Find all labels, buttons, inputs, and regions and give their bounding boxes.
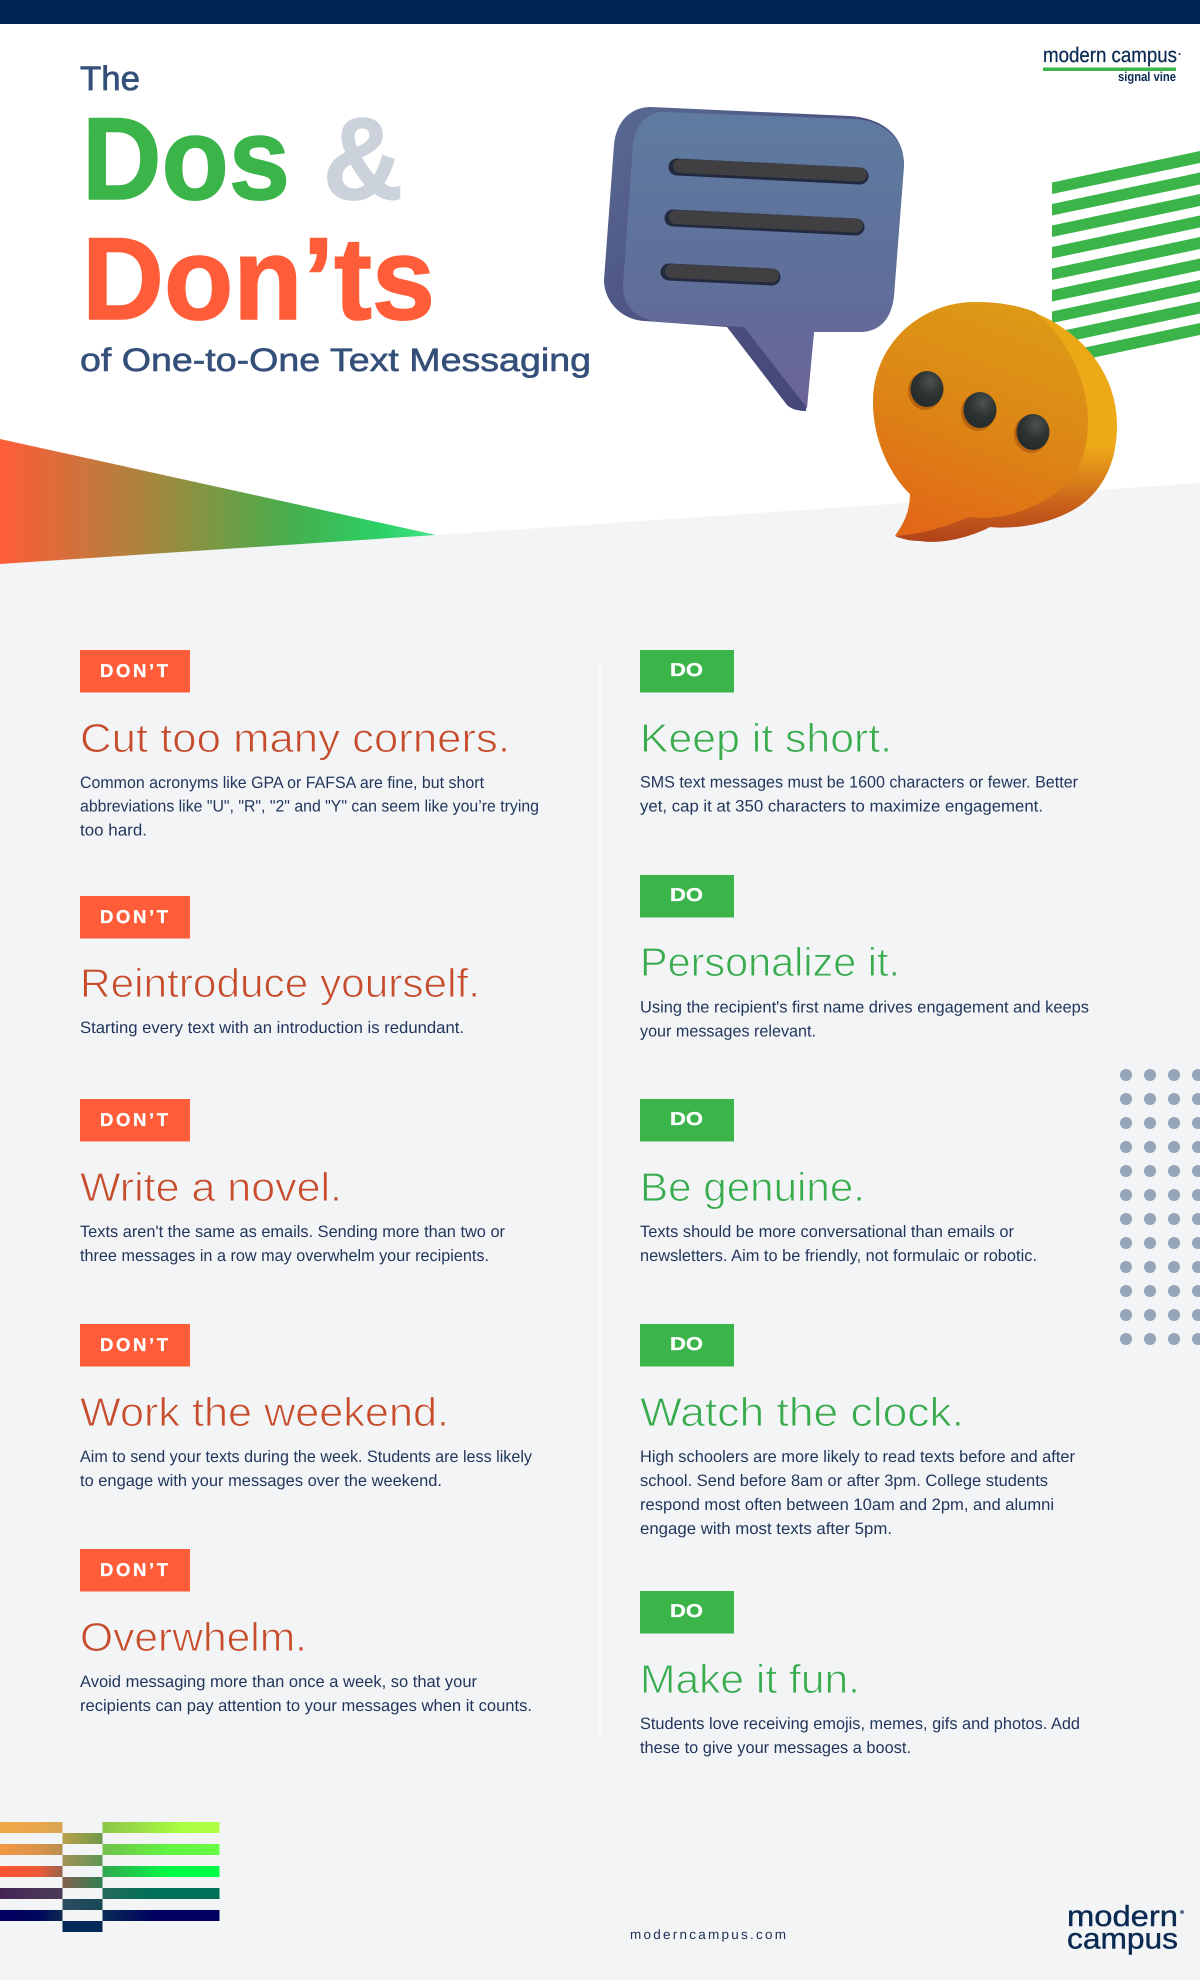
subtitle: of One-to-One Text Messaging [80,342,591,378]
body text: yet, cap it at 350 characters to maximize engagement. [640,798,1043,816]
do badge [640,650,734,692]
body text: Students love receiving emojis, memes, gifs and photos. Add [640,1715,1080,1733]
heading: Personalize it. [640,939,900,985]
heading: Work the weekend. [80,1389,449,1435]
body text: to engage with your messages over the weekend. [80,1472,442,1490]
don't badge: DON’T [100,1334,169,1355]
body text: these to give your messages a boost. [640,1739,911,1757]
title word: Don'ts: Don’ts [82,213,435,344]
heading: Keep it short. [640,715,892,761]
dot grid decoration [1120,1069,1200,1345]
panel: do personalize it [640,875,1089,1040]
body text: newsletters. Aim to be friendly, not formulaic or robotic. [640,1247,1037,1265]
do badge [640,1099,734,1142]
body text [640,1223,1037,1265]
body text: Texts should be more conversational than emails or [640,1223,1014,1241]
heading: Write a novel. [80,1164,342,1210]
footer logo: modern campus [1067,1901,1184,1956]
don't badge [80,1099,190,1142]
do badge: DO [670,659,703,680]
panel: do keep it short [640,650,1078,816]
title [80,60,591,378]
grey lower background panel [0,483,1200,1980]
footer url: moderncampus.com [630,1927,786,1942]
panel: don't work the weekend [80,1324,533,1490]
do badge [640,875,734,918]
body text: respond most often between 10am and 2pm, and alumni [640,1496,1054,1514]
heading: Watch the clock. [640,1389,964,1435]
do badge [640,1591,734,1634]
body text: engage with most texts after 5pm. [640,1520,892,1538]
don't badge [80,1549,190,1592]
title word: Dos: Dos [82,93,290,224]
body text [640,998,1089,1040]
body text: High schoolers are more likely to read texts before and after [640,1448,1076,1466]
don't badge: DON’T [100,1109,169,1130]
heading: Overwhelm. [80,1614,307,1660]
heading: Make it fun. [640,1656,860,1702]
do badge: DO [670,1108,703,1129]
do badge: DO [670,1600,703,1621]
body text: three messages in a row may overwhelm your recipients. [80,1247,489,1265]
heading: Reintroduce yourself. [80,960,480,1006]
body text [640,1715,1080,1757]
body text: SMS text messages must be 1600 characters or fewer. Better [640,774,1078,792]
green diagonal stripes [1052,151,1200,366]
body text [640,774,1078,816]
panel: don't overwhelm [80,1549,532,1715]
logo: modern campus signal vine: signal vine [1118,69,1176,84]
heading: Be genuine. [640,1164,865,1210]
body text [640,1448,1076,1538]
body text: Texts aren't the same as emails. Sending more than two or [80,1223,505,1241]
body text: Starting every text with an introduction is redundant. [80,1019,464,1037]
logo: modern campus signal vine [1043,44,1180,84]
title ampersand: & [323,93,403,224]
icon: blue speech bubble [604,107,904,411]
column divider [599,660,601,1738]
don't badge: DON’T [100,906,169,927]
do badge: DO [670,1333,703,1354]
body text: Avoid messaging more than once a week, so that your [80,1673,477,1691]
panel: do be genuine [640,1099,1037,1265]
body text [80,1448,533,1490]
body text: recipients can pay attention to your messages when it counts. [80,1697,532,1715]
top navy bar [0,0,1200,24]
body text: abbreviations like "U", "R", "2" and "Y" can seem like you’re trying [80,798,539,816]
body text [80,1673,532,1715]
gradient wedge [0,439,436,564]
panel: do watch the clock [640,1324,1076,1538]
footer logo: modern campus: campus [1067,1924,1178,1956]
panel: do make it fun [640,1591,1080,1757]
body text: Using the recipient's first name drives engagement and keeps [640,998,1089,1016]
body text [80,774,539,840]
title line: The: The [80,60,140,98]
body text: too hard. [80,822,147,840]
do badge [640,1324,734,1366]
don't badge: DON’T [100,660,169,681]
body text: school. Send before 8am or after 3pm. College students [640,1472,1048,1490]
panel: don't cut too many corners [80,650,539,840]
panel: don't write a novel [80,1099,505,1265]
don't badge [80,650,190,692]
don't badge: DON’T [100,1559,169,1580]
logo: modern campus signal vine: modern campus [1043,44,1177,67]
don't badge [80,1324,190,1366]
footer logo: modern campus: modern [1067,1901,1178,1933]
icon: orange speech bubble [873,302,1117,542]
body text: Common acronyms like GPA or FAFSA are fine, but short [80,774,484,792]
gradient checker bars decoration [0,1822,220,1932]
body text: your messages relevant. [640,1022,816,1040]
heading: Cut too many corners. [80,715,510,761]
do badge: DO [670,884,703,905]
body text: Aim to send your texts during the week. Students are less likely [80,1448,533,1466]
body text [80,1223,505,1265]
don't badge [80,896,190,938]
panel: don't reintroduce yourself [80,896,480,1037]
